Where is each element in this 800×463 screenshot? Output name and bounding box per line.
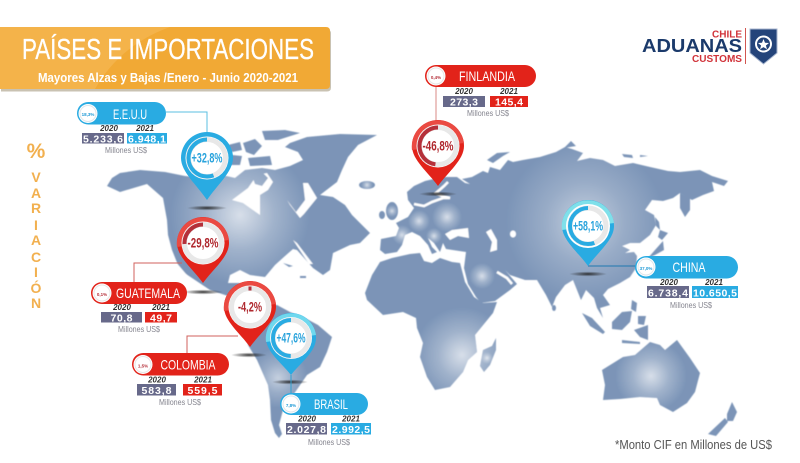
panel: Guatemala xyxy=(91,282,187,334)
values xyxy=(286,414,371,447)
values: Millones US$ xyxy=(670,300,712,310)
values: 2021 xyxy=(499,87,518,96)
title banner xyxy=(0,27,331,92)
values: 2020 xyxy=(659,278,678,287)
values: 2021 xyxy=(704,278,723,287)
values: 70,8 xyxy=(110,312,133,324)
logo: Aduanas Chile Customs: CUSTOMS xyxy=(692,54,742,65)
pin: E.E.U.U +32,8%: +32,8% xyxy=(191,150,223,166)
pill: CHINA xyxy=(672,259,706,275)
pin: China +58,1% xyxy=(562,200,614,266)
pill: 37,0% xyxy=(640,266,652,271)
pin: China +58,1%: +58,1% xyxy=(573,218,603,234)
icon: shield xyxy=(750,29,777,64)
panel: Colombia xyxy=(132,353,229,407)
values xyxy=(443,87,528,118)
subtitle: Mayores Alzas y Bajas /Enero - Junio 2020-2021 xyxy=(38,71,298,85)
values xyxy=(101,303,177,334)
values: 10.650,5 xyxy=(693,288,737,300)
logo: Aduanas Chile Customs xyxy=(642,28,777,65)
values: Millones US$ xyxy=(159,397,201,407)
vertical label: % variación: I xyxy=(34,217,38,233)
values xyxy=(82,124,167,155)
values: 145,4 xyxy=(495,96,523,108)
pin shadows xyxy=(183,192,607,384)
values: 2021 xyxy=(151,303,170,312)
values: 2021 xyxy=(193,376,212,384)
connector lines xyxy=(134,87,636,393)
pin: Colombia -4,2% xyxy=(224,281,276,347)
values: 2021 xyxy=(135,124,154,133)
vertical label: % variación: A xyxy=(31,232,41,248)
vertical label: % variación: C xyxy=(31,249,41,265)
pin: Guatemala -29,8%: -29,8% xyxy=(188,236,218,250)
values: 6.738,4 xyxy=(648,288,688,300)
pin: Guatemala -29,8% xyxy=(177,217,229,283)
values: 6.948,1 xyxy=(128,134,166,146)
values: 2020 xyxy=(147,376,166,384)
values: 559,5 xyxy=(188,385,218,397)
values: 2021 xyxy=(341,414,360,424)
pill xyxy=(91,282,187,304)
vertical label: % variación: R xyxy=(31,200,41,216)
pill: 0,1% xyxy=(97,292,107,297)
values: 2.992,5 xyxy=(332,424,370,436)
world map xyxy=(107,130,737,438)
pill xyxy=(77,102,166,124)
values: 583,8 xyxy=(142,385,172,397)
logo: Aduanas Chile Customs: CHILE xyxy=(712,30,742,40)
pill: 0,4% xyxy=(431,75,441,80)
values xyxy=(647,278,738,310)
pill: GUATEMALA xyxy=(116,285,180,301)
vertical label: % variación xyxy=(27,140,46,311)
values xyxy=(137,376,222,407)
pill: 18,3% xyxy=(82,112,94,117)
values: 2020 xyxy=(454,87,473,96)
vertical label: % variación: A xyxy=(31,185,41,201)
pill: FINLANDIA xyxy=(459,68,516,84)
values: Millones US$ xyxy=(118,324,160,334)
vertical label: % variación: V xyxy=(31,169,41,185)
values: 2020 xyxy=(297,414,316,424)
vertical label: % variación: % xyxy=(27,140,46,163)
pin: E.E.U.U +32,8% xyxy=(181,132,233,200)
footnote: *Monto CIF en Millones de US$ xyxy=(615,438,772,452)
pill: 7,8% xyxy=(286,403,296,408)
pill: COLOMBIA xyxy=(160,356,216,372)
title: PAÍSES E IMPORTACIONES xyxy=(22,33,314,66)
pin: Finlandia -46,8% xyxy=(412,120,464,186)
pill xyxy=(132,353,229,376)
panel: China xyxy=(635,256,738,310)
logo: Aduanas Chile Customs: ADUANAS xyxy=(642,36,742,56)
values: 2.027,8 xyxy=(287,424,326,436)
values: Millones US$ xyxy=(467,108,509,118)
values: 2020 xyxy=(112,303,131,312)
pin: Colombia -4,2%: -4,2% xyxy=(238,300,262,314)
vertical label: % variación: I xyxy=(34,264,38,280)
values: 2020 xyxy=(99,124,118,133)
vertical label: % variación: Ó xyxy=(31,279,42,296)
values: 5.233,6 xyxy=(83,134,123,146)
values: 273,3 xyxy=(450,96,478,108)
pill: 1,5% xyxy=(138,364,148,368)
pill: BRASIL xyxy=(314,396,348,412)
vertical label: % variación: N xyxy=(31,295,41,311)
values: Millones US$ xyxy=(105,145,147,155)
pin: Brasil +47,6%: +47,6% xyxy=(276,330,306,346)
pin: Brasil +47,6% xyxy=(266,313,316,375)
pill xyxy=(425,65,536,87)
panel: E.E.U.U xyxy=(77,102,167,155)
pill xyxy=(635,256,738,278)
values: 49,7 xyxy=(150,312,172,324)
pill: E.E.U.U xyxy=(113,106,147,122)
pill xyxy=(280,393,368,415)
values: Millones US$ xyxy=(308,437,350,447)
panel: Finlandia xyxy=(425,65,536,118)
panel: Brasil xyxy=(280,393,371,447)
pin: Finlandia -46,8%: -46,8% xyxy=(422,138,454,154)
